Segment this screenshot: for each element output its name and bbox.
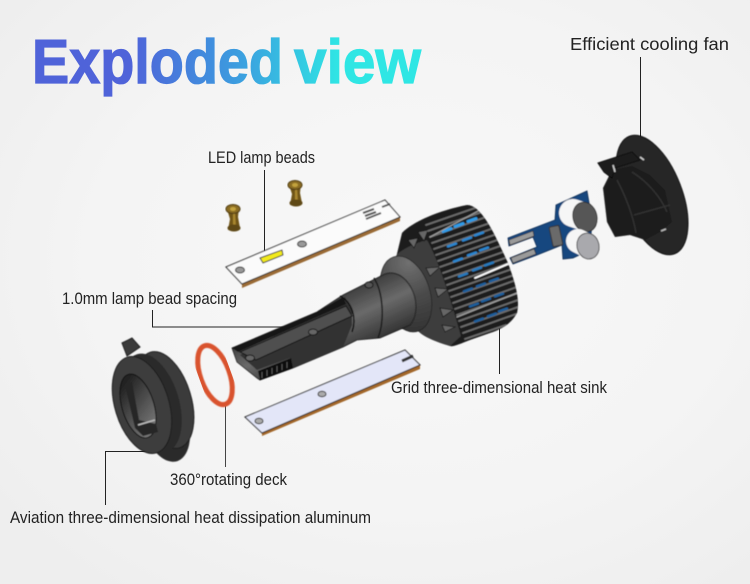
label: efficient cooling fan: Efficient cooling fan [570, 34, 729, 54]
label: aviation aluminum: Aviation three-dimensional heat dissipation aluminum [10, 509, 371, 527]
label: aviation aluminum [10, 452, 371, 527]
icon: lower capacitor [574, 231, 602, 261]
upper LED circuit board [226, 200, 400, 288]
lower circuit board [245, 350, 420, 436]
title: view [294, 28, 422, 97]
grid heat sink [371, 205, 518, 346]
heat sink dome [396, 240, 461, 346]
rotating deck socket [102, 338, 204, 468]
icon: yellow LED bead [260, 250, 283, 263]
icon: brass screw left [226, 204, 240, 232]
label: lamp bead spacing: 1.0mm lamp bead spacing [62, 290, 237, 308]
label: rotating deck: 360°rotating deck [170, 471, 288, 489]
collar ring [371, 249, 441, 339]
icon: upper capacitor [570, 199, 600, 235]
rubber sealing ring [191, 341, 239, 409]
label: rotating deck [170, 406, 288, 489]
driver circuit board [508, 191, 602, 264]
LED bulb shaft [232, 273, 416, 380]
label: LED lamp beads [208, 149, 315, 255]
title: Exploded [32, 28, 283, 97]
label: LED lamp beads: LED lamp beads [208, 149, 315, 167]
label: lamp bead spacing [62, 290, 292, 327]
icon: brass screw right [288, 180, 302, 206]
label: grid heat sink: Grid three-dimensional heat sink [391, 379, 608, 397]
heat sink fins [426, 208, 518, 339]
cooling fan [598, 125, 703, 265]
